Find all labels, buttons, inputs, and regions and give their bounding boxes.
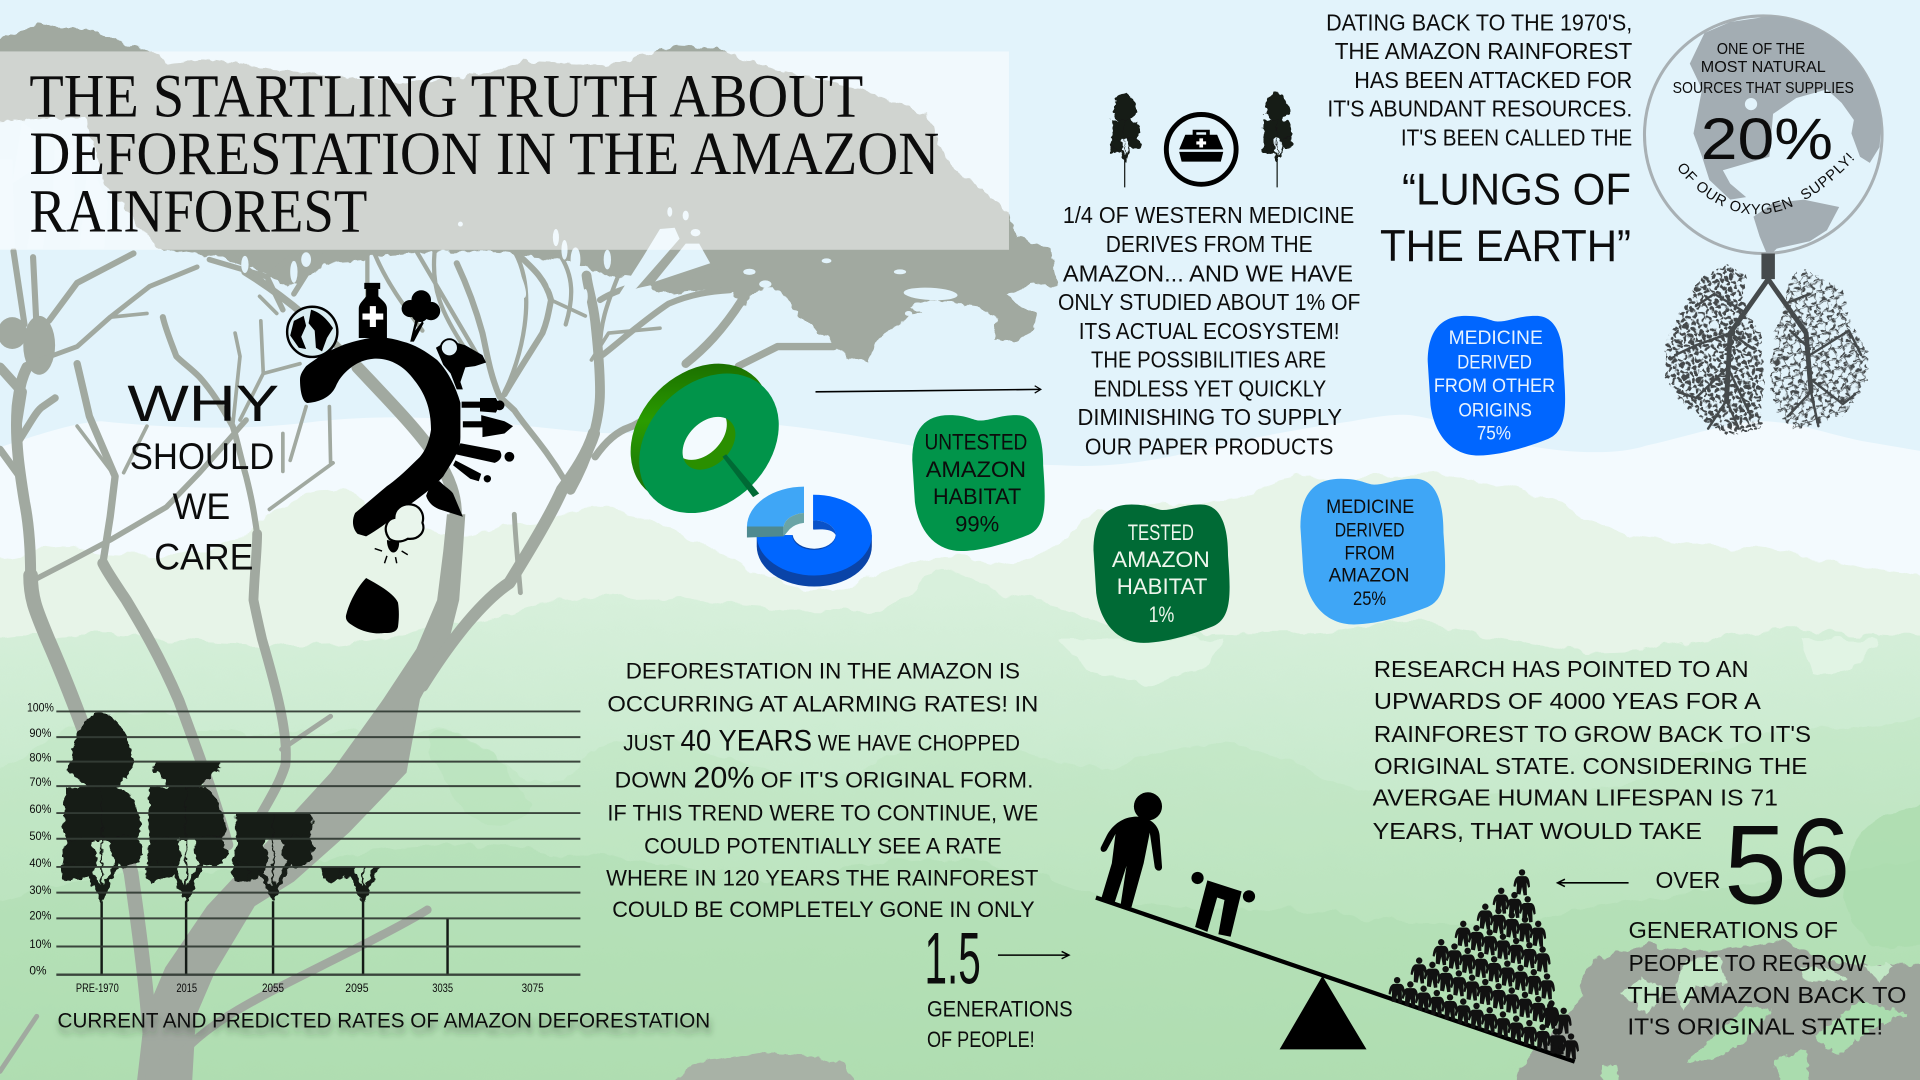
bubble: tested habitat: AMAZON — [1112, 547, 1210, 572]
question mark stroke — [300, 338, 460, 536]
stat: 56 generations: OVER — [1656, 867, 1720, 893]
y axis labels: 80% — [29, 751, 52, 765]
tree bars — [61, 711, 448, 975]
icon: earth globe with oxygen stat — [1643, 14, 1884, 255]
text: regrowth research: YEARS, THAT WOULD TAKE — [1373, 818, 1702, 844]
icon: people on rails — [453, 398, 514, 482]
question mark dot — [346, 578, 399, 633]
y axis labels: 0% — [29, 964, 47, 978]
text: lungs of the earth intro: THE EARTH” — [1380, 222, 1631, 271]
bubble: medicine from amazon: FROM — [1344, 543, 1395, 565]
bubble: medicine from other origins: MEDICINE — [1449, 327, 1543, 349]
text: western medicine: ONLY STUDIED ABOUT 1% OF — [1058, 289, 1360, 315]
bubble: medicine from amazon — [1300, 479, 1445, 624]
text: deforestation rates — [606, 658, 1038, 922]
icon: earth globe with oxygen stat: MOST NATURAL — [1701, 59, 1826, 76]
bubble: medicine from other origins: 75% — [1477, 423, 1511, 445]
why should we care heading — [127, 374, 279, 577]
icon: cloud and bulb — [375, 504, 423, 563]
bubble: medicine from other origins: DERIVED — [1457, 352, 1532, 374]
icon: globe — [287, 307, 337, 357]
x axis labels — [76, 981, 544, 995]
text: lungs of the earth intro: HAS BEEN ATTACKED FOR — [1354, 67, 1632, 93]
why should we care heading: WHY — [127, 374, 279, 432]
icon: medical bag between trees — [1109, 93, 1292, 187]
stat: 56 generations: GENERATIONS OF — [1629, 917, 1838, 943]
why should we care heading: CARE — [154, 536, 253, 577]
icon: tree — [402, 290, 440, 342]
text: lungs of the earth intro: DATING BACK TO THE 1970'S, — [1326, 10, 1632, 36]
text: regrowth research: UPWARDS OF 4000 YEAS FOR A — [1374, 688, 1761, 714]
bubble: medicine from other origins: ORIGINS — [1458, 399, 1532, 421]
tree canopy — [0, 24, 1058, 364]
small person — [1191, 872, 1255, 937]
bubble: tested habitat: TESTED — [1128, 520, 1194, 545]
text: lungs of the earth intro — [1326, 10, 1632, 271]
bubble: medicine from amazon: AMAZON — [1329, 565, 1409, 587]
text: deforestation rates: DOWN 20% OF IT'S ORIGINAL FORM. — [615, 761, 1033, 794]
icon: leaf — [426, 481, 463, 517]
x axis labels: PRE-1970 — [76, 981, 119, 995]
why should we care heading: SHOULD — [130, 436, 274, 477]
text: western medicine: THE POSSIBILITIES ARE — [1091, 346, 1326, 372]
bubble: medicine from other origins: FROM OTHER — [1434, 375, 1555, 397]
x axis labels: 2095 — [345, 981, 369, 995]
stat: 56 generations — [1558, 794, 1907, 1040]
y axis labels: 70% — [29, 775, 52, 789]
bubble: untested habitat: AMAZON — [926, 457, 1026, 482]
text: deforestation rates: JUST 40 YEARS WE HAVE CHOPPED — [623, 725, 1020, 758]
text: regrowth research: RAINFOREST TO GROW BACK TO IT'S — [1374, 721, 1811, 747]
bubble: medicine from other origins — [1428, 316, 1565, 456]
stat: 1.5 generations: OF PEOPLE! — [927, 1027, 1035, 1052]
green donut chart — [630, 364, 779, 513]
y axis labels: 10% — [29, 937, 52, 951]
text: western medicine: DERIVES FROM THE — [1106, 231, 1313, 257]
icon: monkey climber — [436, 339, 486, 389]
blue donut chart — [747, 487, 872, 587]
chart caption: CURRENT AND PREDICTED RATES OF AMAZON DEFORESTATION — [58, 1009, 710, 1032]
text: western medicine: OUR PAPER PRODUCTS — [1085, 433, 1333, 459]
why should we care heading: WE — [173, 486, 230, 527]
text: lungs of the earth intro: IT'S BEEN CALLED THE — [1401, 125, 1632, 151]
medicine from amazon slice — [747, 487, 804, 538]
title: THE STARTLING TRUTH ABOUT — [29, 62, 863, 130]
text: deforestation rates: IF THIS TREND WERE TO CONTINUE, WE — [607, 800, 1038, 825]
bottom centre foliage — [667, 1053, 861, 1080]
question mark icon cluster — [287, 283, 514, 633]
text: western medicine: 1/4 OF WESTERN MEDICINE — [1063, 202, 1354, 228]
bubble: tested habitat: HABITAT — [1117, 574, 1207, 599]
stat: 1.5 generations: 1.5 — [924, 916, 981, 999]
y axis labels: 50% — [29, 829, 52, 843]
y axis labels: 90% — [29, 726, 52, 740]
left tree crown branches — [0, 250, 618, 580]
bubble: untested habitat: 99% — [955, 511, 999, 536]
text: regrowth research — [1373, 656, 1811, 844]
title: RAINFOREST — [29, 177, 367, 245]
bubble: untested habitat — [912, 415, 1045, 551]
gridlines — [56, 711, 580, 975]
tested slice — [722, 454, 759, 497]
text: regrowth research: ORIGINAL STATE. CONSIDERING THE — [1374, 753, 1807, 779]
main trunk — [137, 514, 465, 1080]
title: DEFORESTATION IN THE AMAZON — [29, 120, 939, 188]
text: deforestation rates: WHERE IN 120 YEARS THE RAINFOREST — [606, 865, 1038, 890]
text: lungs of the earth intro: “LUNGS OF — [1402, 165, 1631, 214]
icon: earth globe with oxygen stat: OF OUR OXYGENSUPPLY! — [1678, 152, 1854, 214]
text: deforestation rates: COULD BE COMPLETELY GONE IN ONLY — [612, 897, 1035, 922]
big person — [1101, 792, 1162, 907]
text: deforestation rates: OCCURRING AT ALARMING RATES! IN — [607, 691, 1038, 716]
bubble: tested habitat: 1% — [1149, 602, 1174, 627]
seesaw fulcrum — [1280, 976, 1367, 1049]
text: deforestation rates: COULD POTENTIALLY SEE A RATE — [644, 833, 1002, 858]
x axis labels: 2015 — [176, 981, 197, 995]
text: western medicine — [1058, 202, 1360, 459]
seesaw comparison graphic — [1096, 792, 1579, 1062]
x axis labels: 3035 — [432, 981, 453, 995]
bubble: medicine from amazon: MEDICINE — [1326, 496, 1414, 518]
stat: 56 generations: IT'S ORIGINAL STATE! — [1627, 1014, 1883, 1040]
bubble: tested habitat — [1093, 504, 1230, 643]
bottom canopy light gaps — [1600, 956, 1907, 1080]
bubble: medicine from amazon: 25% — [1353, 588, 1386, 610]
title band — [0, 51, 1009, 250]
canopy gaps and leaves — [0, 122, 958, 316]
title — [29, 62, 939, 245]
icon: bottle — [359, 283, 387, 338]
secondary branches — [0, 250, 834, 1080]
icon: earth globe with oxygen stat: 20% — [1701, 107, 1833, 172]
bottom canopy — [1515, 940, 1920, 1080]
x axis labels: 2055 — [262, 981, 284, 995]
y axis labels — [27, 700, 54, 978]
text: lungs of the earth intro: THE AMAZON RAINFOREST — [1335, 38, 1632, 64]
bubble: medicine from amazon: DERIVED — [1335, 519, 1404, 541]
bubble: untested habitat: HABITAT — [933, 484, 1021, 509]
stat: 56 generations: PEOPLE TO REGROW — [1629, 950, 1866, 976]
icon: tree-shaped lungs — [1665, 253, 1869, 436]
x axis labels: 3075 — [522, 981, 544, 995]
text: lungs of the earth intro: IT'S ABUNDANT RESOURCES. — [1327, 95, 1632, 121]
text: deforestation rates: DEFORESTATION IN THE AMAZON IS — [626, 658, 1020, 683]
bubble: untested habitat: UNTESTED — [924, 429, 1027, 454]
stat: 1.5 generations: GENERATIONS — [927, 996, 1073, 1021]
stat: 56 generations: 56 — [1724, 794, 1850, 928]
text: western medicine: ITS ACTUAL ECOSYSTEM! — [1079, 318, 1340, 344]
arrow to medicine text — [816, 386, 1041, 393]
text: western medicine: ENDLESS YET QUICKLY — [1093, 376, 1326, 402]
y axis labels: 20% — [29, 909, 52, 923]
y axis labels: 60% — [29, 802, 52, 816]
seesaw beam — [1096, 898, 1575, 1062]
icon: earth globe with oxygen stat: ONE OF THE — [1717, 41, 1805, 58]
pyramid of people — [1389, 869, 1579, 1059]
text: western medicine: DIMINISHING TO SUPPLY — [1078, 404, 1342, 430]
text: regrowth research: AVERGAE HUMAN LIFESPAN IS 71 — [1373, 785, 1778, 811]
bar chart: deforestation rates — [27, 700, 580, 995]
y axis labels: 30% — [29, 883, 52, 897]
stat: 56 generations: THE AMAZON BACK TO — [1627, 982, 1907, 1008]
text: regrowth research: RESEARCH HAS POINTED TO AN — [1374, 656, 1749, 682]
icon: earth globe with oxygen stat: SOURCES THAT SUPPLIES — [1673, 80, 1854, 97]
y axis labels: 100% — [27, 700, 54, 714]
text: western medicine: AMAZON... AND WE HAVE — [1063, 261, 1353, 287]
stat: 1.5 generations — [924, 916, 1073, 1052]
y axis labels: 40% — [29, 856, 52, 870]
